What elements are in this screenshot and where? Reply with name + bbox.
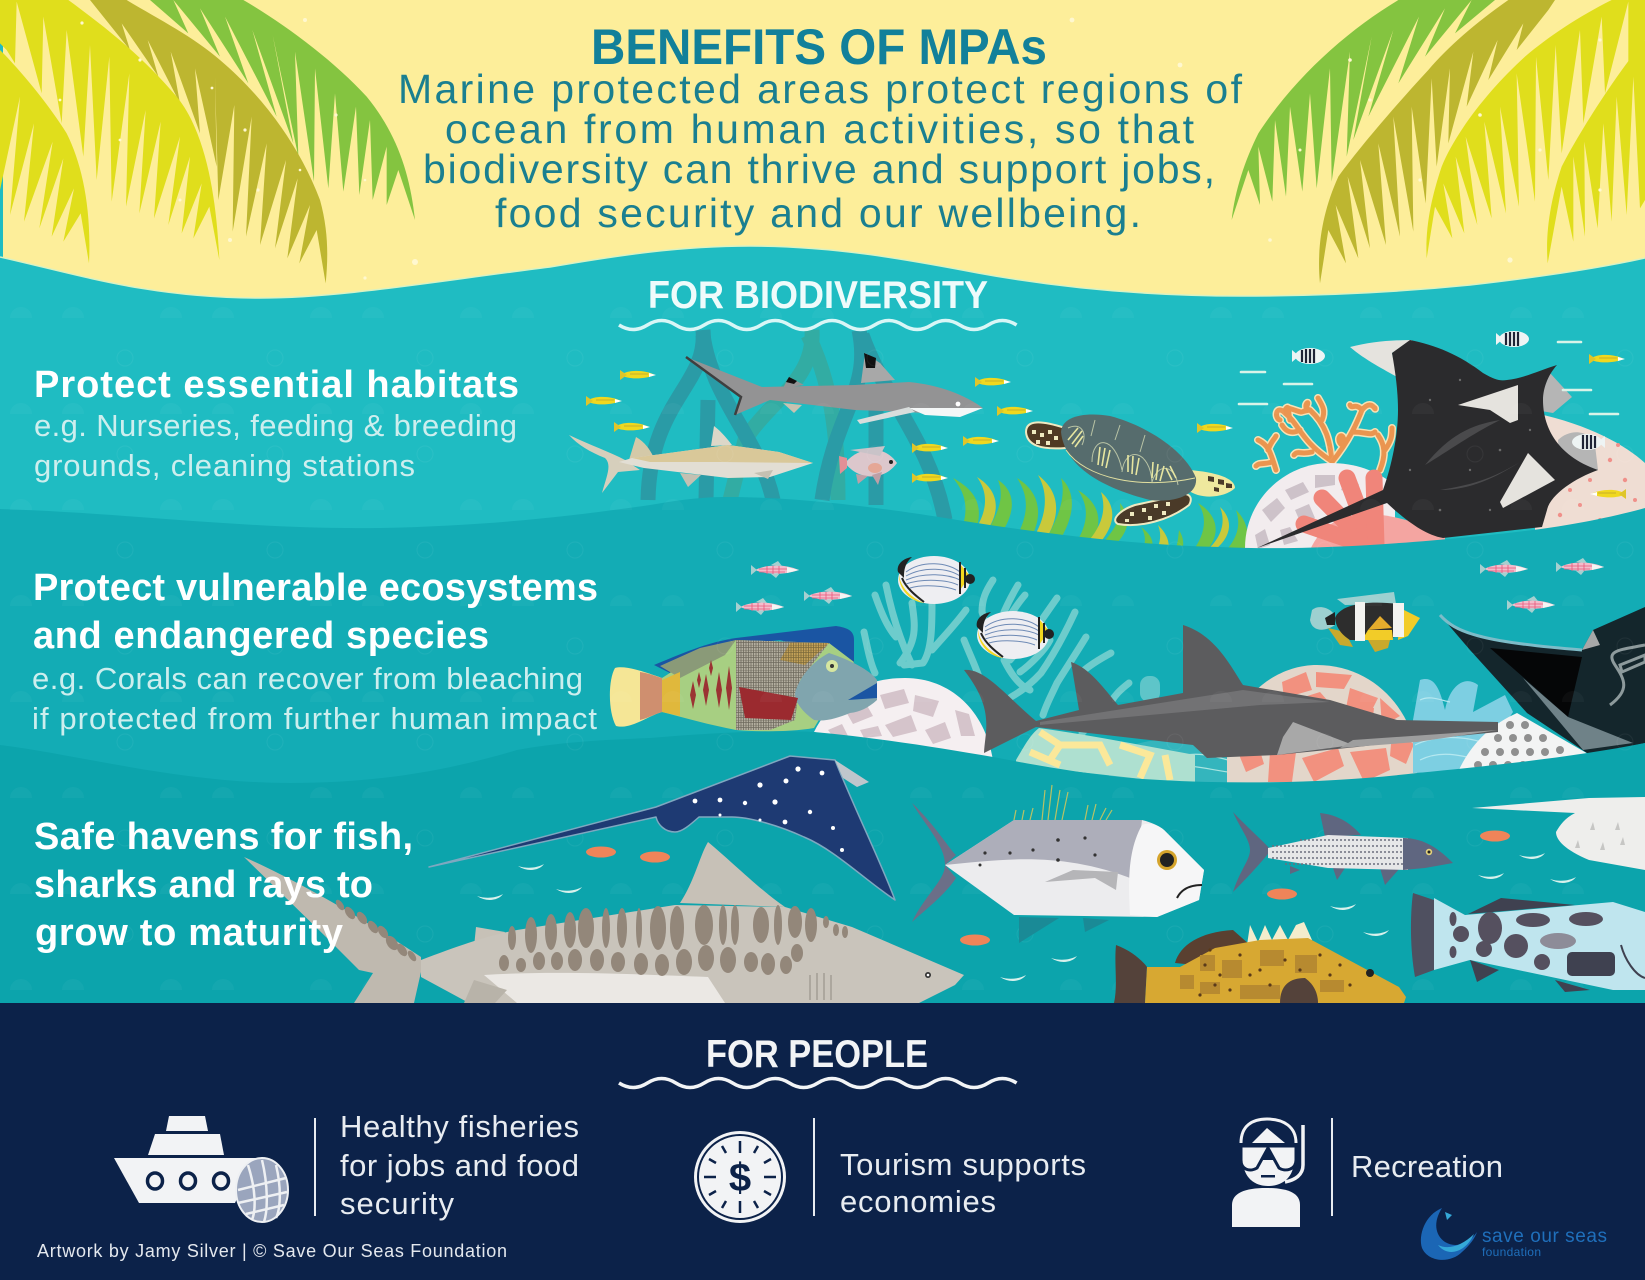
logo: save our seas foundation xyxy=(1421,1208,1607,1260)
fish: eagle ray xyxy=(429,756,895,900)
text: protect essential habitats xyxy=(34,364,519,483)
fish: blue spotted xyxy=(1411,893,1645,992)
text: protect vulnerable ecosystems: Protect vulnerable ecosystems xyxy=(33,567,598,609)
coral: branching orange xyxy=(1256,398,1392,470)
coral: salmon fan xyxy=(1304,478,1445,552)
heading: for biodiversity: FOR BIODIVERSITY xyxy=(648,274,988,317)
turtle xyxy=(1026,415,1235,525)
sand background xyxy=(0,0,1645,1003)
intro text: food security and our wellbeing. xyxy=(495,190,1141,236)
seagrass xyxy=(953,475,1248,552)
coral: teal striped xyxy=(1100,676,1230,785)
text: healthy fisheries: for jobs and food xyxy=(340,1148,579,1183)
water texture xyxy=(0,300,1645,1003)
icon: clock with dollar xyxy=(694,1131,786,1223)
text: tourism xyxy=(840,1147,1086,1219)
water band 3 xyxy=(0,731,1645,1003)
squiggle underline xyxy=(619,1078,1017,1088)
fish: sawfish xyxy=(964,625,1498,758)
divider xyxy=(813,1118,815,1216)
intro text: ocean from human activities, so that xyxy=(445,106,1195,152)
text: protect essential habitats: grounds, cleaning stations xyxy=(34,448,415,483)
coral: blue fingers xyxy=(1413,679,1513,773)
coral: pink speckled xyxy=(1535,373,1645,535)
fish: small tilapia xyxy=(839,446,897,485)
fish: tiger shark xyxy=(244,842,964,1003)
navy panel: for people xyxy=(0,1003,1645,1280)
text: safe havens: Safe havens for fish, xyxy=(34,816,413,858)
coral: salmon tile xyxy=(1227,665,1417,790)
fish: butterflyfish pair xyxy=(898,556,1054,659)
squiggle underline xyxy=(619,320,1017,330)
palm fronds left xyxy=(0,0,415,283)
text: healthy fisheries xyxy=(340,1109,579,1221)
divider xyxy=(314,1118,316,1216)
text: healthy fisheries: Healthy fisheries xyxy=(340,1109,579,1144)
small yellow fish shoal xyxy=(586,354,1625,483)
text: protect essential habitats: Protect essential habitats xyxy=(34,364,519,406)
fish: black-tip reef shark xyxy=(686,353,983,424)
small pink fish shoal xyxy=(736,558,1604,615)
palm fronds right xyxy=(1232,0,1645,283)
text: protect vulnerable ecosystems: e.g. Corals can recover from bleaching xyxy=(32,661,583,696)
logo: save our seas foundation: foundation xyxy=(1482,1245,1541,1259)
text: tourism: economies xyxy=(840,1184,996,1219)
intro text: biodiversity can thrive and support jobs, xyxy=(423,146,1215,192)
left edge strip xyxy=(0,20,3,260)
text: protect vulnerable ecosystems xyxy=(32,567,598,736)
zebra fish and white minnows xyxy=(1239,331,1626,499)
coral: white brain coral xyxy=(1245,463,1395,550)
coral: yellow maze xyxy=(1016,728,1195,785)
intro text: Marine protected areas protect regions of xyxy=(398,66,1243,112)
water band 2 xyxy=(0,497,1645,1003)
manta ray xyxy=(1257,340,1598,548)
credit line: Artwork by Jamy Silver | © Save Our Seas Foundation xyxy=(37,1241,507,1261)
black ray right xyxy=(1440,607,1645,755)
icon: snorkeler xyxy=(1232,1119,1303,1227)
heading: for people xyxy=(619,1033,1017,1088)
logo: save our seas foundation: save our seas xyxy=(1482,1226,1607,1247)
coral: gray hexagon xyxy=(1458,713,1590,772)
orange fish and silver minnows xyxy=(477,830,1576,981)
fish: clownfish xyxy=(1310,592,1420,652)
fish: jack xyxy=(912,785,1204,943)
divider xyxy=(1331,1118,1333,1216)
sand speckles xyxy=(59,18,1602,280)
text: safe havens xyxy=(34,816,413,954)
coral: white tile xyxy=(814,678,1000,760)
water band 1 xyxy=(0,246,1645,1003)
fish: bonefish xyxy=(1233,812,1453,892)
fish: grouper xyxy=(1114,922,1406,1003)
fish: humphead wrasse xyxy=(610,626,877,731)
text: healthy fisheries: security xyxy=(340,1186,454,1221)
icon: clock with dollar: $ xyxy=(729,1156,751,1200)
text: protect essential habitats: e.g. Nurseries, feeding & breeding xyxy=(34,408,517,443)
text: safe havens: grow to maturity xyxy=(35,912,343,954)
text: safe havens: sharks and rays to xyxy=(34,864,373,906)
mangrove roots xyxy=(648,330,945,520)
text: recreation: Recreation xyxy=(1351,1149,1503,1184)
coral: pale staghorn xyxy=(864,580,1129,733)
text: protect vulnerable ecosystems: and endangered species xyxy=(33,615,489,657)
fish: sandy shark xyxy=(569,426,813,493)
title: BENEFITS OF MPAs xyxy=(591,19,1047,75)
heading: for people: FOR PEOPLE xyxy=(706,1033,928,1076)
intro text xyxy=(398,66,1243,236)
text: tourism: Tourism supports xyxy=(840,1147,1086,1182)
text: protect vulnerable ecosystems: if protected from further human impact xyxy=(32,701,597,736)
ray right (white) xyxy=(1472,797,1645,870)
icon: fishing boat with net xyxy=(114,1116,288,1222)
